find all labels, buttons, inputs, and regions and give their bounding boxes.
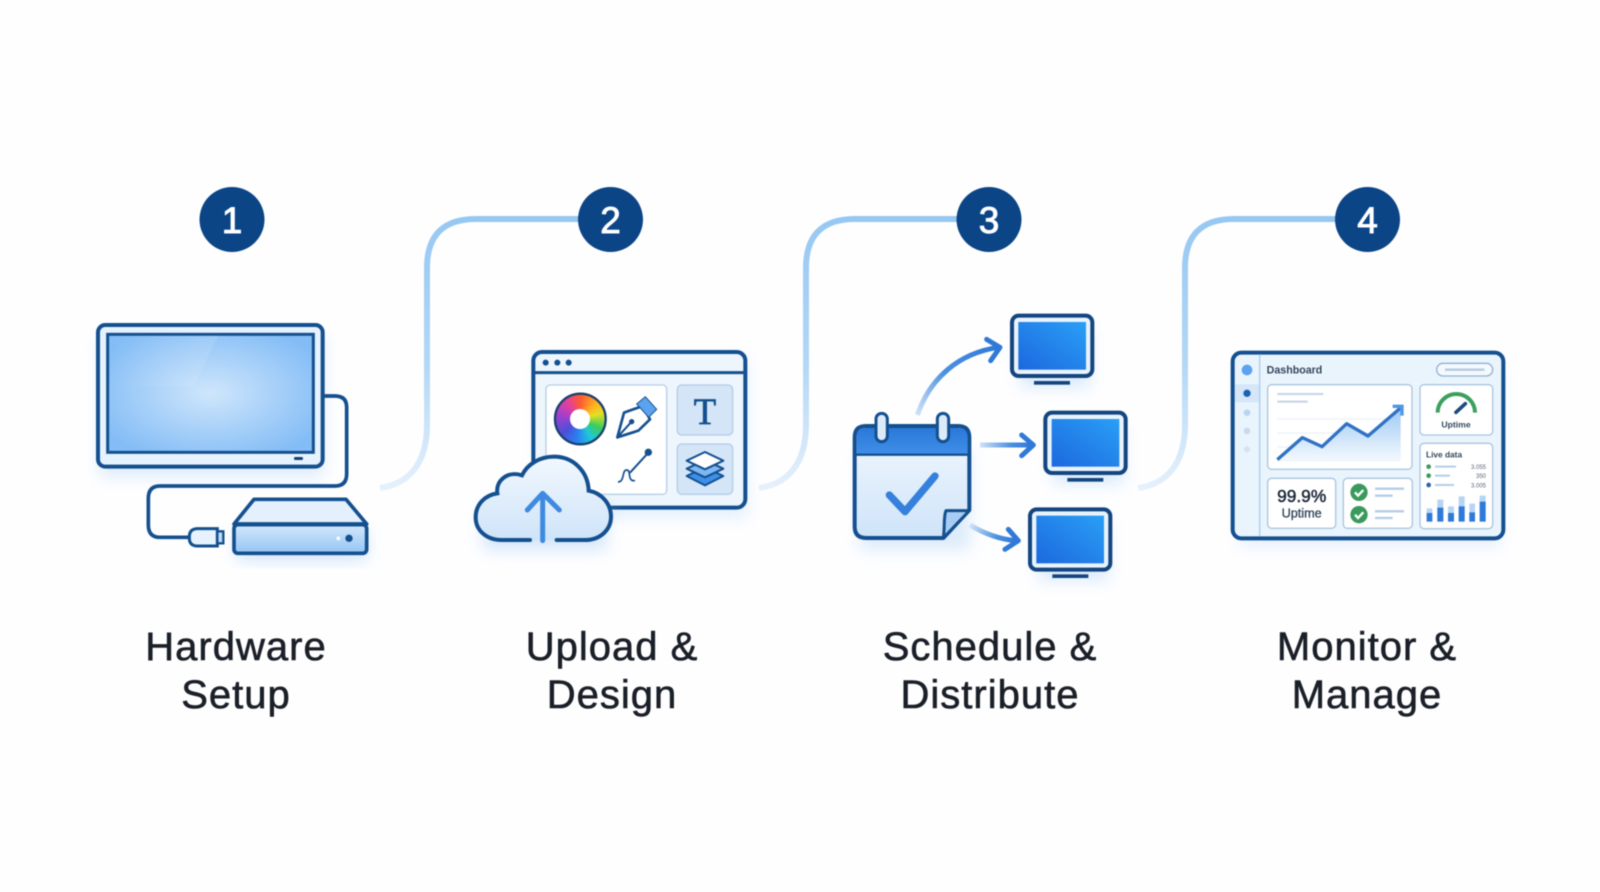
status checks card: [1343, 478, 1412, 528]
text tool tile: T: [694, 391, 716, 432]
calendar: [855, 413, 969, 538]
label: Schedule & Distribute: Schedule &: [883, 625, 1097, 669]
step badge 3: [956, 187, 1022, 252]
step badge 3: 3: [979, 200, 999, 241]
gauge card: Uptime: [1441, 419, 1471, 429]
USB plug: [189, 529, 223, 546]
dashboard title: Dashboard: [1267, 364, 1322, 376]
icon: pen nib: [617, 397, 657, 437]
search pill: [1437, 363, 1493, 376]
connector: step 3 to 4: [1138, 219, 1343, 488]
step badge 4: 4: [1357, 200, 1378, 241]
icon: monitor and media player: [98, 325, 367, 560]
line chart card: [1268, 385, 1412, 469]
icon: monitoring dashboard: [1233, 353, 1503, 545]
monitor: [98, 325, 323, 467]
icon: design window with cloud upload: [476, 352, 747, 550]
label: Hardware Setup: Hardware: [145, 625, 327, 669]
step badge 2: 2: [600, 200, 621, 241]
connector: step 1 to 2: [380, 219, 585, 488]
icon: calendar distributing to screens: [855, 316, 1126, 580]
screen middle: [1045, 413, 1126, 482]
text tool tile: [677, 385, 733, 435]
uptime stat card: Uptime: [1282, 507, 1322, 521]
step badge 4: [1335, 187, 1400, 252]
live data card: 3.055: [1471, 465, 1487, 471]
icon: brush: [618, 449, 652, 482]
label: Upload & Design: Design: [547, 673, 677, 717]
arrow to middle screen: [980, 435, 1033, 456]
canvas panel: [546, 385, 667, 494]
live data card: 3.005: [1471, 483, 1487, 489]
dashboard frame: [1233, 353, 1503, 538]
screen bottom: [1030, 509, 1110, 578]
sidebar: [1235, 365, 1259, 452]
step badge 1: [200, 187, 264, 252]
label: Hardware Setup: Setup: [181, 673, 291, 717]
arrow to top screen: [917, 339, 1000, 415]
media player box: [234, 499, 367, 553]
label: Upload & Design: Upload &: [526, 625, 698, 669]
connector: step 2 to 3: [759, 219, 964, 488]
uptime stat card: [1268, 478, 1336, 528]
cable: [148, 396, 347, 537]
gauge card: [1420, 385, 1493, 435]
label: Schedule & Distribute: Distribute: [901, 673, 1079, 717]
browser window: [533, 352, 745, 508]
live data card: Live data: [1426, 449, 1462, 459]
uptime stat card: 99.9%: [1277, 486, 1326, 506]
layers tile: [677, 444, 733, 494]
upload arrow: [527, 493, 559, 541]
label: Monitor & Manage: Manage: [1292, 673, 1442, 717]
live data card: [1420, 443, 1493, 529]
live data card: 350: [1476, 474, 1487, 480]
step badge 1: 1: [222, 200, 242, 241]
arrow to bottom screen: [970, 525, 1018, 549]
color wheel: [554, 393, 607, 445]
label: Monitor & Manage: Monitor &: [1277, 625, 1457, 669]
cloud: [476, 457, 611, 540]
step badge 2: [578, 187, 643, 252]
screen top: [1012, 316, 1092, 385]
